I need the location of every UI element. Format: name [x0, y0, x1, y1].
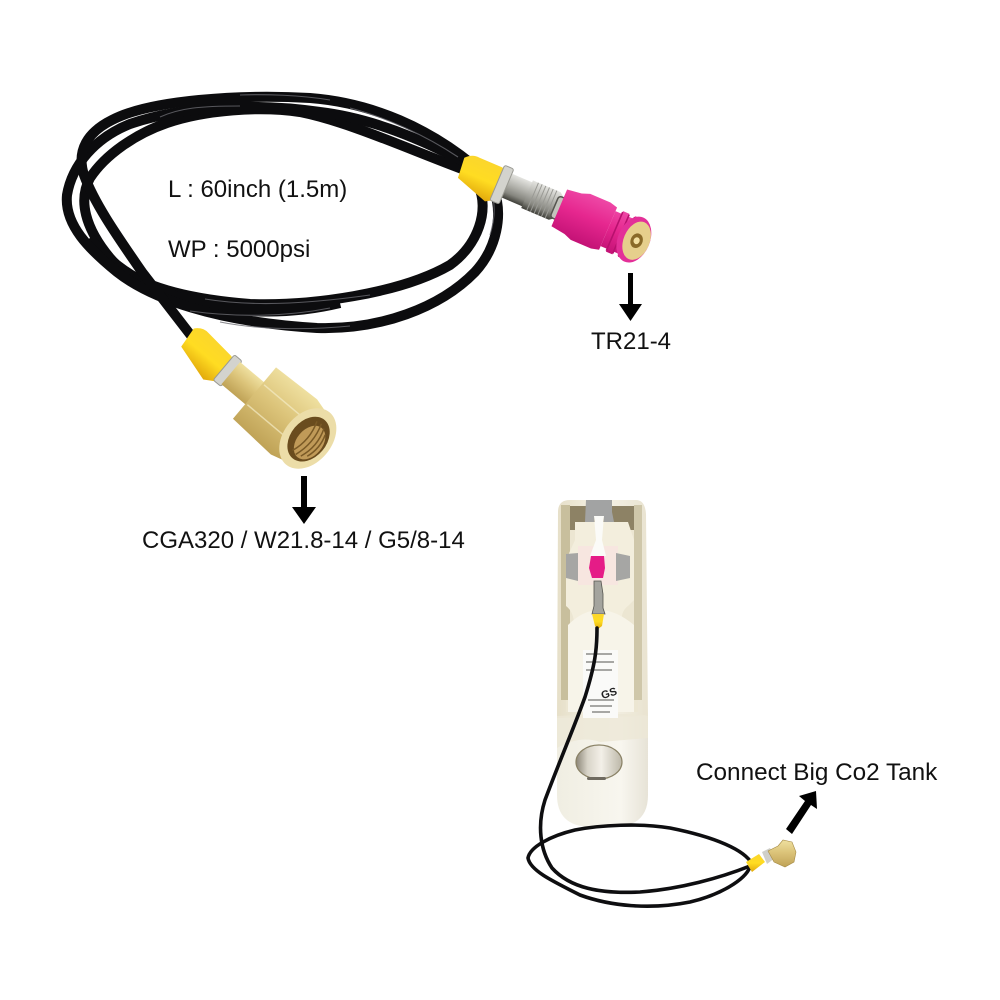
silver nut: [213, 355, 242, 386]
arrow: to CGA320: [292, 476, 316, 524]
arrow: to big tank: [786, 791, 817, 834]
white label: GS: [600, 686, 619, 702]
tank housing interior: [561, 505, 642, 712]
brass hex nut: [231, 366, 349, 481]
label: connect big tank: Connect Big Co2 Tank: [696, 759, 938, 786]
brass nut: [768, 840, 796, 867]
tank assembly: [557, 500, 648, 827]
silver fitting in tank: [592, 581, 605, 614]
thin black hose: [528, 628, 752, 906]
curved shelf: [557, 714, 648, 748]
arrow: to TR21-4: [619, 273, 642, 321]
label: TR21-4: TR21-4: [591, 328, 671, 355]
brass cylinder: [221, 362, 266, 406]
yellow sleeve: [173, 324, 238, 388]
white valve: [590, 516, 606, 556]
yellow sleeve: [746, 854, 765, 872]
coiled black hose: [67, 95, 498, 342]
cylinder hole: [576, 745, 622, 779]
text: working pressure: WP : 5000psi: [168, 236, 310, 263]
small brass fitting: [746, 840, 796, 872]
silver nut: [490, 165, 514, 204]
brass face: [617, 217, 656, 264]
threaded opening: [279, 408, 338, 470]
yellow sleeve: [452, 152, 509, 205]
tank housing upper: [557, 500, 648, 720]
silver body: [496, 170, 572, 224]
label: CGA320: CGA320 / W21.8-14 / G5/8-14: [142, 527, 465, 554]
fitting: TR21-4 connector: [451, 143, 658, 269]
tank housing lower: [557, 716, 648, 827]
yellow sleeve in tank: [592, 614, 604, 629]
top grey clip: [585, 500, 614, 522]
pink connector: [550, 185, 658, 269]
fitting: CGA320 brass nut: [164, 309, 349, 481]
silver collar: [762, 848, 775, 864]
text: length: L : 60inch (1.5m): [168, 176, 347, 203]
slot: [587, 777, 606, 780]
white label: [583, 650, 619, 718]
side grey clips: [566, 553, 630, 581]
pink connector in tank: [589, 556, 605, 578]
